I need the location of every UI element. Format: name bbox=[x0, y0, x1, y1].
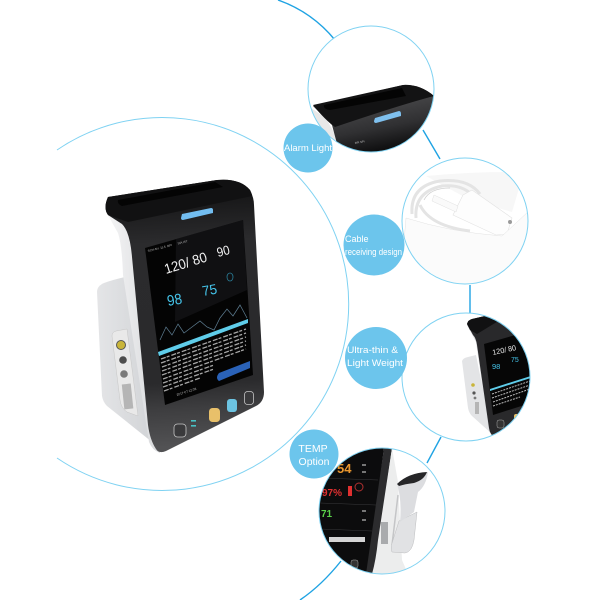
connector: ultra-thin to temp bbox=[427, 437, 441, 463]
bubble: cable receiving design bbox=[344, 214, 404, 276]
white shell edge bbox=[312, 108, 336, 140]
red ring bbox=[355, 483, 363, 491]
carry handle bbox=[106, 180, 252, 222]
screen bbox=[145, 220, 253, 405]
status ring bbox=[227, 273, 233, 281]
red alarm bar bbox=[348, 486, 352, 496]
waveform bbox=[160, 305, 247, 340]
connector: alarm to cable bbox=[423, 130, 440, 159]
thermometer head bbox=[397, 472, 427, 486]
screen bbox=[316, 448, 384, 574]
blood pressure reading: 120/ 80 bbox=[162, 249, 209, 277]
yellow button bbox=[514, 414, 518, 418]
small labels: BPI SPI bbox=[354, 139, 365, 145]
connector arc: top bbox=[278, 0, 335, 40]
bubble: cable receiving design: receiving design bbox=[345, 247, 402, 257]
side connector panel bbox=[112, 329, 138, 416]
alarm light bar bbox=[374, 111, 401, 123]
monitor side shell bbox=[372, 448, 408, 574]
SpO2 reading 98: 98 bbox=[166, 291, 183, 310]
pulse reading 75: 75 bbox=[201, 281, 218, 299]
status bar bbox=[329, 537, 365, 542]
screen glare bbox=[175, 220, 247, 322]
handle bbox=[467, 316, 500, 334]
infographic canvas bbox=[56, 0, 530, 600]
alarm light bbox=[181, 208, 213, 220]
handle slot bbox=[324, 88, 406, 110]
screen bbox=[484, 336, 530, 415]
bubble: temp option: TEMP bbox=[298, 443, 328, 455]
sensor holster bbox=[391, 512, 417, 553]
handle top bbox=[313, 85, 434, 127]
face close-up bbox=[313, 85, 434, 155]
coiled cable bbox=[412, 181, 480, 231]
sensor cable plug bbox=[432, 195, 458, 212]
bubble: ultra-thin and light weight: Ultra-thin & bbox=[347, 345, 399, 356]
detail circle: temp option bbox=[316, 448, 445, 574]
reading: 75 bbox=[511, 357, 519, 364]
cable coil inner shade bbox=[424, 188, 450, 200]
screen row dividers bbox=[320, 478, 378, 531]
shell crease bbox=[392, 495, 398, 545]
main monitor bbox=[97, 180, 264, 453]
reading: 98 bbox=[492, 362, 500, 371]
monitor white side shell bbox=[105, 210, 175, 453]
black face bbox=[467, 316, 523, 435]
blue status button bbox=[217, 361, 250, 381]
data table bbox=[161, 329, 246, 391]
top status text: SCH AH 11.5 BPI SPI.IST bbox=[147, 239, 188, 253]
shell back wall bbox=[426, 172, 520, 212]
monitor rear box bbox=[97, 277, 152, 442]
green reading: 71 bbox=[321, 509, 333, 520]
table header bbox=[158, 319, 248, 356]
large circle outline around monitor bbox=[57, 117, 349, 490]
table bbox=[492, 381, 530, 406]
bubble: ultra-thin and light weight bbox=[345, 327, 407, 389]
monitor black face bbox=[106, 180, 264, 452]
red reading: 97% bbox=[322, 488, 342, 499]
detail circle: ultra-thin side view bbox=[402, 313, 540, 441]
bubble: temp option bbox=[290, 430, 338, 478]
date stamp: 2017-07 12:38 bbox=[176, 387, 197, 397]
side icons bbox=[362, 465, 366, 520]
bubble: cable receiving design: Cable bbox=[345, 234, 369, 244]
black bezel bbox=[366, 448, 392, 574]
shell front lip bbox=[404, 212, 527, 237]
button bbox=[497, 420, 504, 428]
bubble: temp option: Option bbox=[299, 456, 330, 468]
rear box bbox=[462, 355, 489, 431]
clip bbox=[381, 522, 388, 544]
reading: 120/ 80 bbox=[492, 343, 517, 357]
bubble: ultra-thin and light weight: Light Weight bbox=[347, 358, 403, 369]
detail circle: alarm light bbox=[308, 26, 434, 155]
reading 90: 90 bbox=[215, 242, 231, 260]
orange reading: 54 bbox=[337, 461, 352, 476]
bubble: alarm light: Alarm Light bbox=[284, 143, 332, 154]
power button bbox=[351, 560, 358, 568]
connector: cable to ultra-thin bbox=[469, 285, 471, 313]
white shell bbox=[467, 325, 490, 432]
bubble: alarm light bbox=[284, 124, 332, 172]
side ports bbox=[471, 383, 479, 414]
sensor end dot bbox=[508, 220, 512, 224]
buttons and LEDs bbox=[174, 392, 254, 437]
finger clip sensor bbox=[453, 190, 512, 235]
detail circle: cable storage bbox=[400, 158, 530, 290]
connector arc: bottom bbox=[300, 561, 341, 600]
thermometer bbox=[397, 472, 428, 522]
cyan bar bbox=[490, 376, 530, 391]
